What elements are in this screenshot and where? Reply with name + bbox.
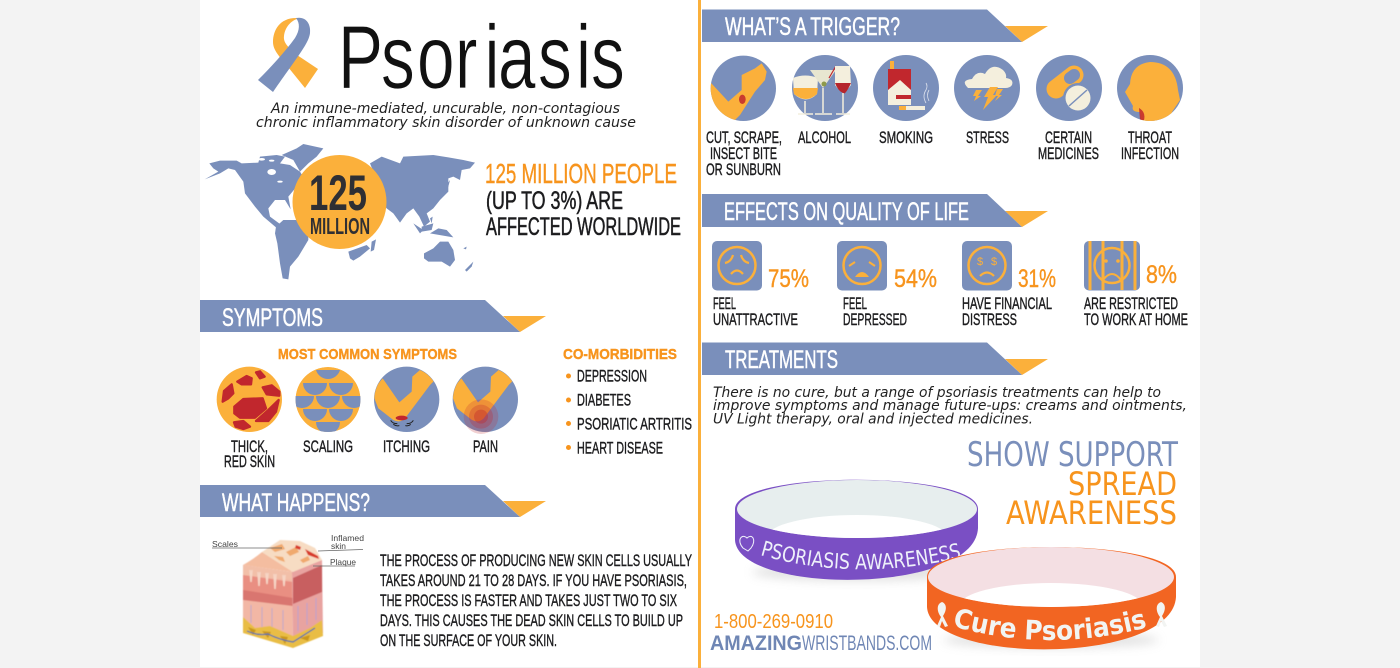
trigger labels: STRESS xyxy=(966,129,1009,147)
white page card xyxy=(200,0,1200,667)
affected worldwide statement: AFFECTED WORLDWIDE xyxy=(486,213,681,241)
effect: financial distress: $ xyxy=(991,256,997,268)
title: Psoriasis xyxy=(338,7,625,107)
icon: alcohol xyxy=(792,55,858,121)
what happens text: TAKES AROUND 21 TO 28 DAYS. IF YOU HAVE PSORIASIS, xyxy=(380,571,687,590)
orange wristband xyxy=(927,547,1176,651)
icon: stress xyxy=(954,55,1020,121)
subtitle: An immune-mediated, uncurable, non-contagious xyxy=(270,101,620,117)
skin cross-section diagram: Scales xyxy=(212,539,238,549)
trigger labels: INSECT BITE xyxy=(710,145,777,163)
banner: what's a trigger: WHAT’S A TRIGGER? xyxy=(725,13,900,41)
icon: cut scrape xyxy=(708,56,776,122)
what happens text: DAYS. THIS CAUSES THE DEAD SKIN CELLS TO BUILD UP xyxy=(380,611,683,630)
affected worldwide statement xyxy=(485,158,681,241)
co-morbidities list: HEART DISEASE xyxy=(577,440,663,458)
treatments text xyxy=(713,385,1187,428)
symptom labels: PAIN xyxy=(473,438,498,456)
effect: financial distress xyxy=(962,241,1056,329)
banner: treatments xyxy=(702,342,1048,375)
effect: financial distress: 31% xyxy=(1018,265,1056,293)
skin cross-section diagram xyxy=(212,533,364,648)
effect: depressed: DEPRESSED xyxy=(843,311,907,329)
world map xyxy=(205,144,475,279)
contact details xyxy=(710,611,932,655)
purple wristband: PSORIASIS AWARENESS xyxy=(762,540,960,570)
show support slogan: SHOW SUPPORT xyxy=(967,435,1178,475)
effect: financial distress: HAVE FINANCIAL xyxy=(962,295,1052,313)
co-morbidities list: DIABETES xyxy=(577,392,631,410)
banner: symptoms xyxy=(200,300,546,332)
affected worldwide statement: 125 MILLION PEOPLE xyxy=(485,158,677,189)
co-morbidities list: DEPRESSION xyxy=(577,368,647,386)
show support slogan xyxy=(967,435,1178,532)
skin cross-section diagram: Inflamed xyxy=(331,533,364,543)
banner: what's a trigger xyxy=(702,10,1048,42)
trigger labels xyxy=(706,129,1179,179)
effect: restricted to work at home xyxy=(1084,241,1188,329)
icon: thick red skin xyxy=(217,367,282,432)
icon: itching xyxy=(372,367,439,432)
trigger labels: CERTAIN xyxy=(1045,129,1092,147)
symptom labels: ITCHING xyxy=(383,438,430,456)
trigger labels: SMOKING xyxy=(879,129,933,147)
banner: treatments: TREATMENTS xyxy=(725,346,838,374)
purple wristband xyxy=(735,480,978,584)
contact details: WRISTBANDS.COM xyxy=(802,632,932,655)
banner: what happens: WHAT HAPPENS? xyxy=(222,489,370,517)
show support slogan: AWARENESS xyxy=(1006,494,1177,532)
affected worldwide statement: (UP TO 3%) ARE xyxy=(486,187,623,215)
trigger labels: MEDICINES xyxy=(1038,145,1099,163)
effect: restricted to work at home: 8% xyxy=(1146,261,1177,289)
co-morbidities list: PSORIATIC ARTRITIS xyxy=(577,416,692,434)
subtitle xyxy=(256,101,636,131)
trigger labels: THROAT xyxy=(1128,129,1172,147)
125 million badge: MILLION xyxy=(310,213,370,239)
effect: financial distress: $ xyxy=(977,256,983,268)
contact details: 1-800-269-0910 xyxy=(714,611,833,633)
trigger labels: ALCOHOL xyxy=(798,129,851,147)
centre divider xyxy=(698,0,701,668)
effect: unattractive: UNATTRACTIVE xyxy=(713,311,798,329)
co-morbidities list: CO-MORBIDITIES xyxy=(563,346,677,363)
symptom labels: THICK, xyxy=(231,438,268,456)
trigger labels: OR SUNBURN xyxy=(706,161,781,179)
icon: throat infection xyxy=(1117,55,1183,125)
icon: pain xyxy=(450,367,518,434)
effect: depressed: 54% xyxy=(894,265,937,293)
effect: financial distress: DISTRESS xyxy=(962,311,1017,329)
125 million badge xyxy=(292,155,386,249)
trigger labels: INFECTION xyxy=(1121,145,1179,163)
effect: depressed: FEEL xyxy=(843,295,867,313)
banner: symptoms: SYMPTOMS xyxy=(222,304,323,332)
icon: scaling xyxy=(296,367,360,432)
orange wristband: Cure Psoriasis xyxy=(955,609,1146,640)
skin cross-section diagram: skin xyxy=(331,541,346,551)
contact details: AMAZING xyxy=(710,632,802,655)
icon: medicines xyxy=(1036,55,1102,121)
125 million badge: 125 xyxy=(309,165,367,221)
what happens text: THE PROCESS OF PRODUCING NEW SKIN CELLS USUALLY xyxy=(380,551,692,570)
treatments text: UV Light therapy, oral and injected medicines. xyxy=(713,412,1033,428)
effect: unattractive: FEEL xyxy=(713,295,736,313)
show support slogan: SPREAD xyxy=(1068,465,1177,503)
subtitle: chronic inflammatory skin disorder of unknown cause xyxy=(256,115,636,131)
symptom labels: RED SKIN xyxy=(224,453,275,471)
icon: smoking xyxy=(873,55,939,121)
symptom labels: SCALING xyxy=(303,438,353,456)
what happens text: ON THE SURFACE OF YOUR SKIN. xyxy=(380,631,557,650)
effect: unattractive xyxy=(712,241,809,329)
trigger labels: CUT, SCRAPE, xyxy=(706,129,782,147)
banner: what happens xyxy=(200,485,546,517)
icon: awareness ribbon xyxy=(258,18,318,92)
what happens text: THE PROCESS IS FASTER AND TAKES JUST TWO TO SIX xyxy=(380,591,677,610)
effect: restricted to work at home: TO WORK AT HOME xyxy=(1084,311,1188,329)
effect: restricted to work at home: ARE RESTRICTED xyxy=(1084,295,1178,313)
treatments text: improve symptoms and manage future-ups: creams and ointments, xyxy=(713,398,1187,414)
banner: effects on quality of life: EFFECTS ON QUALITY OF LIFE xyxy=(724,198,969,226)
skin cross-section diagram: Plaque xyxy=(330,557,356,567)
co-morbidities list xyxy=(563,346,692,458)
effect: unattractive: 75% xyxy=(768,265,809,293)
symptom labels xyxy=(224,438,498,471)
treatments text: There is no cure, but a range of psoriasis treatments can help to xyxy=(713,385,1161,401)
effect: depressed xyxy=(837,241,937,329)
what happens text xyxy=(380,551,692,650)
heading: most common symptoms: MOST COMMON SYMPTOMS xyxy=(278,346,457,363)
